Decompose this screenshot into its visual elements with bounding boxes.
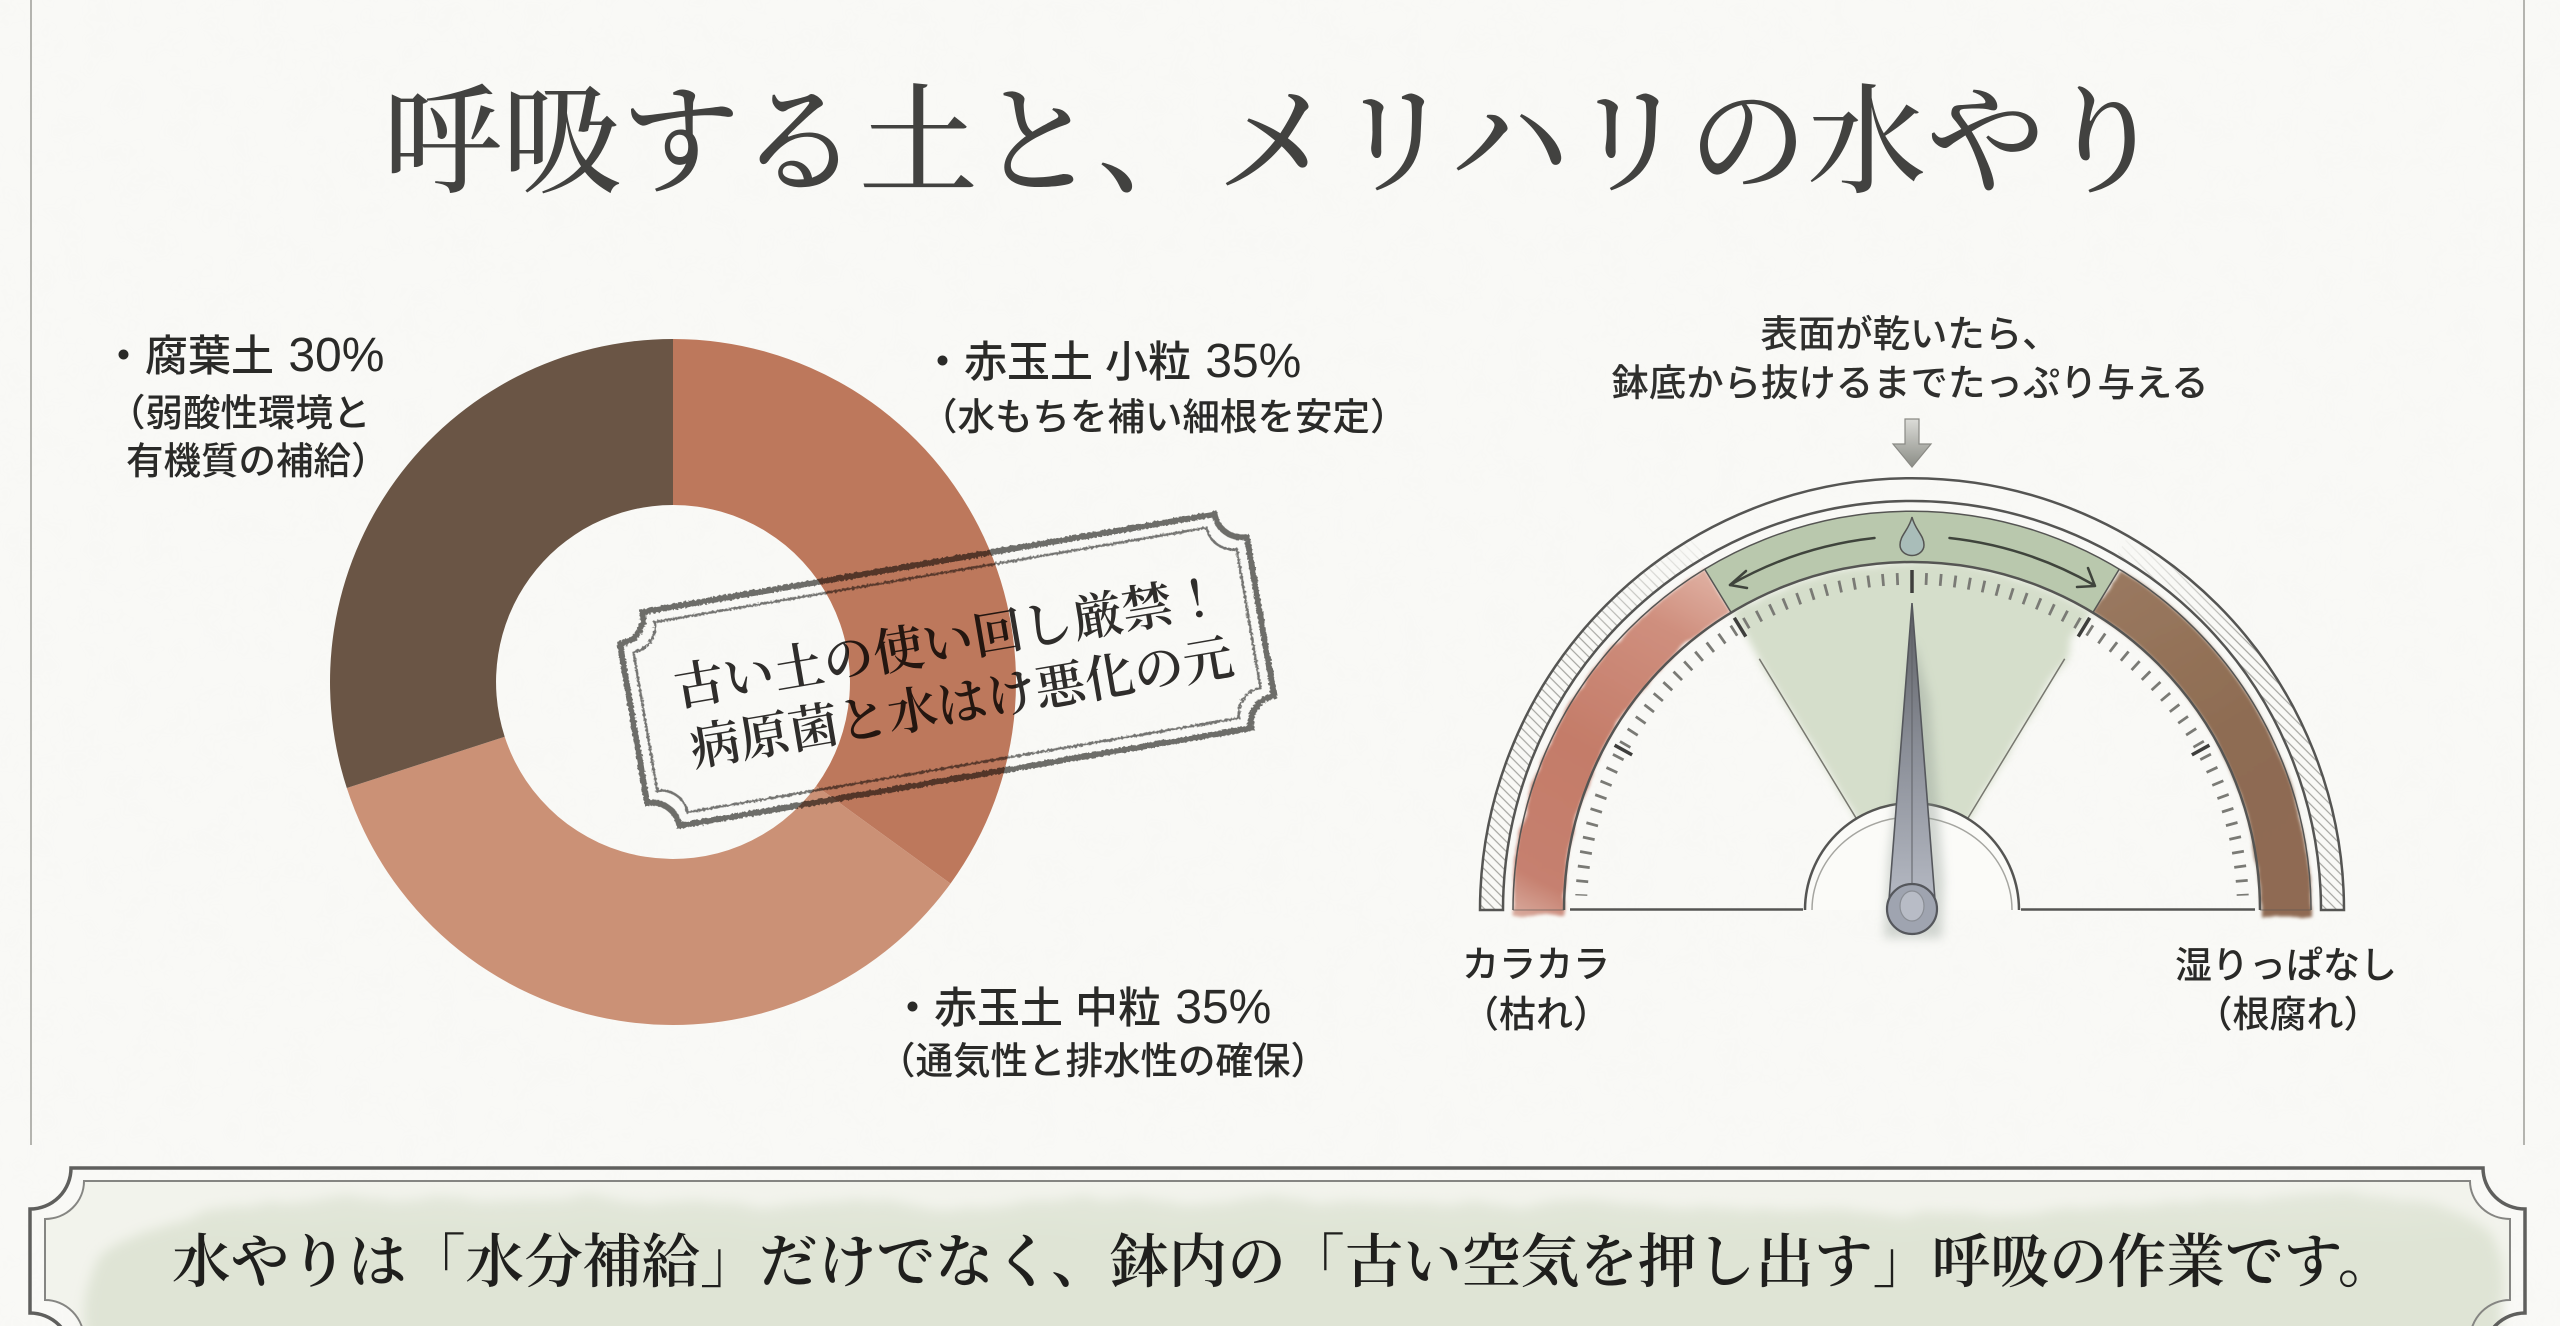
label: 赤玉土 小粒: （水もちを補い細根を安定） xyxy=(920,396,1408,438)
slice: 腐葉土 30% xyxy=(330,339,673,788)
center optimal wedge xyxy=(1731,562,2093,860)
hub xyxy=(1805,803,2019,910)
stamp text xyxy=(670,568,1238,778)
gauge hatching on outer ring xyxy=(1480,536,2344,910)
text: watering instruction: 鉢底から抜けるまでたっぷり与える xyxy=(1611,362,2209,404)
hub inner line xyxy=(1812,817,2012,910)
label: dry end: （枯れ） xyxy=(1462,994,1610,1035)
stamp outer border xyxy=(615,509,1279,831)
label: 腐葉土: ・腐葉土 30% xyxy=(102,329,384,382)
stamp text: 古い土の使い回し厳禁！ xyxy=(670,568,1227,717)
needle shadow xyxy=(1884,640,1944,938)
icon: water drop xyxy=(1900,517,1924,556)
label: dry end xyxy=(1462,944,1610,1035)
label: wet end: 湿りっぱなし xyxy=(2175,945,2397,986)
band outlines xyxy=(1513,511,2311,910)
label: wet end: （根腐れ） xyxy=(2196,994,2380,1035)
text: watering instruction xyxy=(1611,313,2209,404)
arrow: pointing down to gauge xyxy=(1893,419,1931,467)
tick marks xyxy=(1581,579,2243,896)
panel text: 水やりは「水分補給」だけでなく、鉢内の「古い空気を押し出す」呼吸の作業です。 xyxy=(172,1230,2396,1295)
label: dry end: カラカラ xyxy=(1462,944,1610,985)
slice: 赤玉土 小粒 35% xyxy=(673,339,1016,884)
label: 赤玉土 中粒 xyxy=(878,981,1328,1082)
panel: soil mix donut chart xyxy=(330,339,1016,1025)
arrows inside green zone xyxy=(1730,538,2095,588)
label: 赤玉土 小粒: ・赤玉土 小粒 35% xyxy=(921,335,1301,388)
watercolor wash xyxy=(85,1195,2505,1326)
needle xyxy=(1887,603,1937,934)
label: 赤玉土 中粒: （通気性と排水性の確保） xyxy=(878,1040,1328,1082)
zone: optimal (green) xyxy=(1705,511,2119,613)
label: wet end xyxy=(2175,945,2397,1035)
major ticks xyxy=(1615,570,2209,755)
pale panel tint xyxy=(45,1181,2510,1326)
callout: warning stamp xyxy=(615,509,1279,831)
label: 腐葉土: （弱酸性環境と xyxy=(108,392,370,434)
label: 腐葉土 xyxy=(102,329,388,482)
gauge outer ring xyxy=(1480,478,2344,910)
label: 腐葉土: 有機質の補給） xyxy=(126,440,388,482)
panel outer border xyxy=(30,1168,2525,1326)
label: 赤玉土 中粒: ・赤玉土 中粒 35% xyxy=(891,981,1271,1034)
stamp inner border xyxy=(629,523,1265,817)
zone: dry (red) xyxy=(1513,569,1731,916)
panel: bottom message xyxy=(30,1168,2525,1326)
stamp text: 病原菌と水はけ悪化の元 xyxy=(686,629,1238,777)
text: watering instruction: 表面が乾いたら、 xyxy=(1760,313,2060,355)
slice: 赤玉土 中粒 35% xyxy=(347,737,950,1025)
label: 赤玉土 小粒 xyxy=(920,335,1408,438)
title: 呼吸する土と、メリハリの水やり xyxy=(383,77,2164,209)
panel inner border xyxy=(45,1181,2510,1326)
baseline xyxy=(1570,908,2255,911)
zone: wet (brown) xyxy=(2093,569,2311,916)
chart: moisture gauge xyxy=(1480,478,2344,938)
